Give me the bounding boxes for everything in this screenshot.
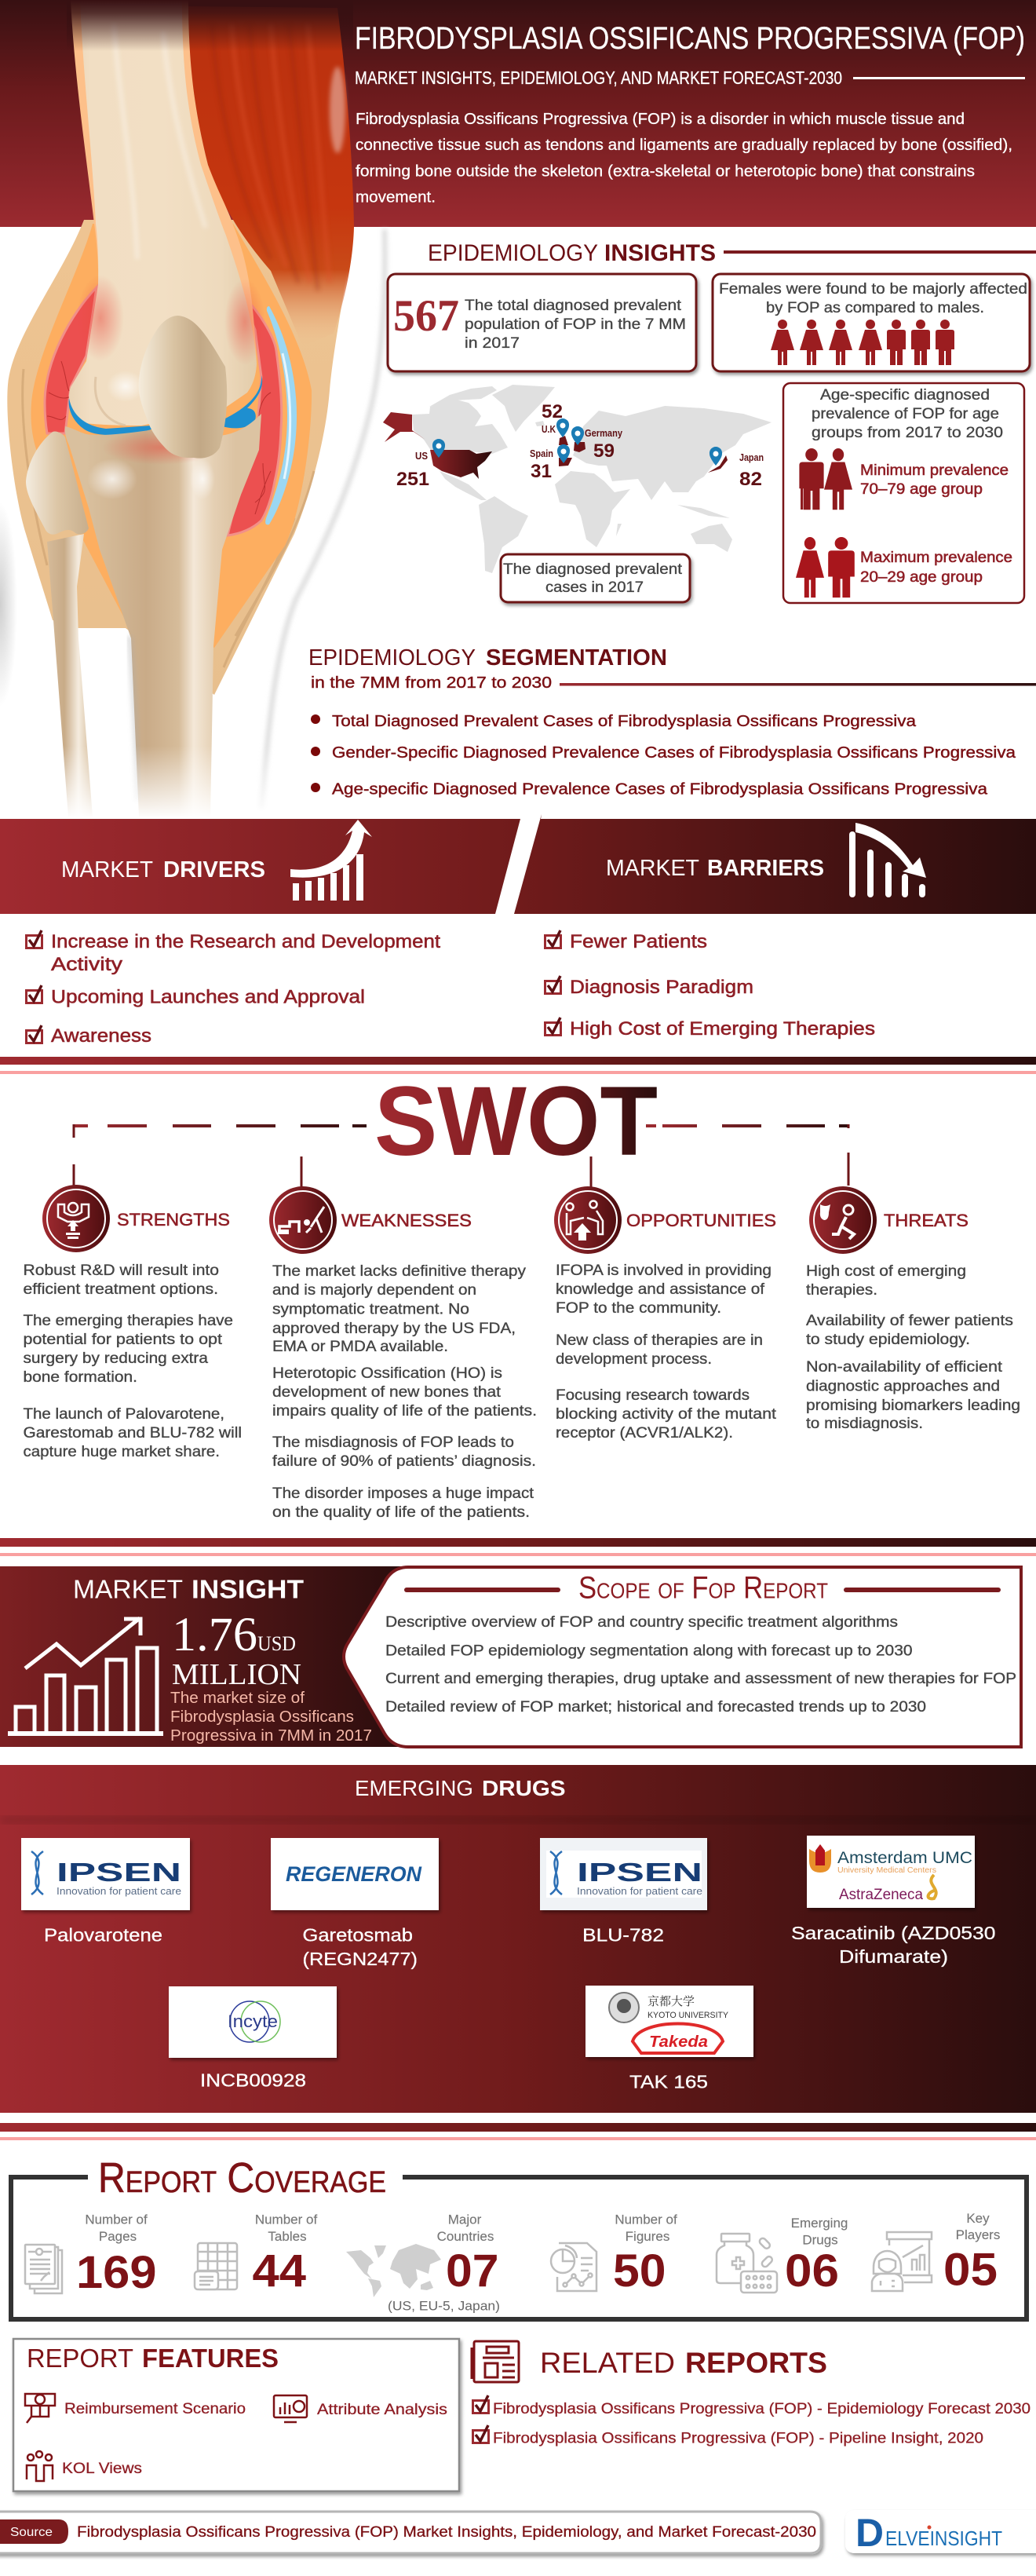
panel: emerging drugs: DRUGS [482,1776,565,1800]
panel: report coverage: Report Coverage [98,2154,386,2201]
stat: major countries [346,2212,500,2313]
icon: people row [771,320,954,365]
icon: strengths [42,1185,110,1252]
text block [806,1263,1020,1432]
list: market barriers: High Cost of Emerging Therapies [570,1018,875,1040]
stat: emerging drugs: Emerging [791,2216,848,2231]
text block: EMA or PMDA available. [272,1339,448,1355]
text block: development process. [556,1351,712,1368]
text block: High cost of emerging [806,1263,966,1280]
callout: diagnosed prevalent cases: The diagnosed prevalent [503,561,683,578]
country values: 251 [396,469,429,490]
panel: strengths: STRENGTHS [117,1210,230,1230]
drug name: Saracatinib (AZD0530 [791,1923,995,1943]
panel: report features [13,2339,459,2491]
logo: Regeneron: REGENERON [286,1862,421,1886]
stat: major countries: (US, EU-5, Japan) [388,2299,500,2313]
icon: opportunities [554,1186,622,1254]
panel: related reports: RELATED [540,2347,675,2379]
text block: Focusing research towards [556,1387,750,1404]
feature: reimbursement scenario: Reimbursement Scenario [64,2400,246,2417]
world map with diagnosed cases [383,385,772,573]
text block: FOP to the community. [556,1300,721,1317]
panel: related reports: Fibrodysplasia Ossificans Progressiva (FOP) - Pipeline Insight, 2020 [493,2431,983,2446]
heading: epidemiology insights [428,240,1036,266]
market size value: USD [257,1632,296,1655]
market size value: 1.76 [172,1609,257,1661]
text block: Robust R&D will result into [24,1262,219,1279]
panel: opportunities [554,1186,777,1441]
logo: Incyte: Incyte [228,2011,278,2031]
stat: emerging drugs [717,2216,848,2296]
feature: attribute analysis: Attribute Analysis [317,2401,447,2418]
country values: Germany [585,427,623,439]
panel: market insight: MARKET [73,1575,183,1603]
segmentation list [311,713,1016,798]
header band [0,0,1036,227]
intro paragraph: forming bone outside the skeleton (extra-skeletal or heterotopic bone) that constrains [356,163,975,181]
scope list: Detailed review of FOP market; historical and forecasted trends up to 2030 [385,1699,926,1716]
panel: age-specific prevalence: 70–79 age group [860,481,983,498]
swot connector lines [73,1124,849,1127]
text block: IFOPA is involved in providing [556,1262,772,1279]
text block: efficient treatment options. [24,1281,218,1298]
stat: figures: 50 [613,2245,666,2296]
feature: KOL views [27,2451,142,2481]
country values: Spain [530,448,553,459]
scope list [385,1614,1016,1716]
text block: New class of therapies are in [556,1332,763,1349]
heading: epidemiology segmentation: EPIDEMIOLOGY [308,645,476,670]
stat: figures: Number of [615,2212,677,2227]
logo: Kyoto University and Takeda [585,1986,753,2057]
callout: females majorly affected: Females were found to be majorly affected [719,281,1027,298]
banner: market drivers: DRIVERS [163,857,265,882]
market size caption: Fibrodysplasia Ossificans [170,1708,354,1726]
heading: epidemiology insights: EPIDEMIOLOGY [428,240,598,266]
text block: The disorder imposes a huge impact [272,1485,534,1502]
list: market barriers: Diagnosis Paradigm [570,977,753,998]
panel: scope of report: Scope of Fop Report [578,1570,828,1605]
logo: DelveInsight: D [855,2511,884,2555]
market size caption [170,1690,372,1745]
drug name [791,1923,995,1967]
country values: 31 [531,461,552,482]
drug name: Difumarate) [839,1946,948,1967]
text block: promising biomarkers leading [806,1398,1020,1414]
country values: Japan [739,451,764,463]
panel: age-specific prevalence: Minimum prevalence [860,462,1009,479]
scope list: Detailed FOP epidemiology segmentation along with forecast up to 2030 [385,1642,912,1660]
banner: market barriers [514,814,1036,914]
callout: 567 total population: population of FOP in the 7 MM [465,316,686,333]
logo: Amsterdam UMC and AstraZeneca: Amsterdam UMC [837,1849,972,1867]
segmentation list: Gender-Specific Diagnosed Prevalence Cases of Fibrodysplasia Ossificans Progressiva [332,744,1016,762]
market size value: MILLION [172,1658,301,1691]
panel: opportunities: OPPORTUNITIES [626,1211,776,1230]
panel: age-specific prevalence [783,383,1024,603]
icon: pill bottle [717,2234,777,2293]
feature: reimbursement scenario [25,2394,246,2423]
text block: The market lacks definitive therapy [272,1263,527,1280]
callout: females majorly affected: by FOP as compared to males. [766,300,984,316]
panel: related reports [472,2341,1031,2446]
callout: females majorly affected [713,274,1030,371]
stat: pages: Number of [85,2212,148,2227]
icon: weaknesses [269,1186,337,1254]
stat: figures [551,2212,677,2296]
stat: key players: Players [956,2227,1000,2242]
logo: Ipsen: IPSEN [57,1858,181,1887]
logo: Ipsen second [540,1838,707,1910]
logo: Ipsen second: IPSEN [577,1858,702,1887]
panel: report features: FEATURES [142,2344,279,2373]
text block: Non-availability of efficient [806,1359,1003,1376]
logo: Kyoto University and Takeda: KYOTO UNIVERSITY [648,2011,729,2020]
icon: world map [346,2244,441,2297]
text block: bone formation. [24,1369,137,1386]
swot heading: SWOT [374,1067,658,1176]
text block [272,1263,537,1521]
text block: surgery by reducing extra [24,1350,208,1367]
stat: pages [25,2212,157,2298]
icon: elderly couple [799,448,852,510]
list: market drivers: Awareness [51,1025,151,1047]
icon: presenter [872,2232,932,2291]
text block: on the quality of life of the patients. [272,1504,530,1521]
panel: related reports: REPORTS [685,2347,827,2379]
icon: rising bars and arrow [290,820,372,901]
icon: document [25,2245,62,2293]
text block: diagnostic approaches and [806,1379,1000,1394]
callout: 567 total population [388,274,696,371]
source bar [0,2512,821,2553]
list: market drivers: Increase in the Research and Development [51,931,440,952]
stat: key players [872,2211,1000,2296]
stat: tables: 44 [253,2245,306,2296]
text block: capture huge market share. [24,1444,220,1460]
intro paragraph [356,111,1012,206]
icon: falling bars and arrow [849,823,926,897]
text block: Availability of fewer patients [806,1313,1013,1329]
stat: figures: Figures [626,2229,669,2244]
source bar: Fibrodysplasia Ossificans Progressiva (FOP) Market Insights, Epidemiology, and Market Forecast-2030 [77,2524,816,2541]
market size caption: The market size of [170,1690,305,1707]
segmentation list: Age-specific Diagnosed Prevalence Cases of Fibrodysplasia Ossificans Progressiva [332,780,988,798]
highlighted countries [430,450,492,479]
text block: The launch of Palovarotene, [24,1406,224,1423]
drug name: BLU-782 [582,1925,664,1946]
drug name: Palovarotene [44,1925,162,1946]
panel: weaknesses [269,1186,537,1521]
icon: report document [472,2341,519,2382]
text block [556,1262,777,1441]
panel: market insight [0,1566,408,1747]
panel: weaknesses: WEAKNESSES [341,1211,472,1230]
drug name: INCB00928 [200,2070,306,2090]
text block: The misdiagnosis of FOP leads to [272,1434,514,1451]
country values: 52 [542,401,563,422]
text block: The emerging therapies have [24,1313,233,1329]
title [355,21,1025,88]
panel: threats [806,1186,1020,1432]
stat: tables: Tables [268,2229,307,2244]
banner: market drivers [0,819,520,914]
list: market drivers: Upcoming Launches and Approval [51,986,365,1008]
panel: related reports: Fibrodysplasia Ossificans Progressiva (FOP) - Epidemiology Forecast 2030 [493,2401,1031,2417]
market size value [172,1609,301,1691]
text block: receptor (ACVR1/ALK2). [556,1425,733,1441]
callout: diagnosed prevalent cases: cases in 2017 [545,579,644,596]
subtitle: MARKET INSIGHTS, EPIDEMIOLOGY, AND MARKET FORECAST-2030 [355,68,842,88]
stat: pages: 169 [76,2247,157,2298]
stat: key players: Key [966,2211,990,2226]
panel: report coverage [11,2154,1027,2319]
callout: diagnosed prevalent cases [501,554,690,602]
stat: key players: 05 [943,2244,998,2296]
text block: and is majorly dependent on [272,1282,476,1299]
panel: age-specific prevalence: Age-specific diagnosed [820,387,990,404]
text block: development of new bones that [272,1384,502,1401]
logo: Amsterdam UMC and AstraZeneca [807,1836,975,1908]
logo: Ipsen [21,1838,190,1910]
logo: Regeneron [271,1838,439,1910]
text block: Garestomab and BLU-782 will [24,1425,242,1441]
icon: growth chart [8,1618,163,1734]
icon: table [195,2243,237,2289]
logo: Ipsen: Innovation for patient care [57,1886,181,1897]
country values: 82 [739,469,762,490]
list: market drivers [27,930,440,1047]
heading: epidemiology segmentation [308,645,1036,692]
callout: 567 total population: 567 [393,291,459,341]
callout: 567 total population: The total diagnosed prevalent [465,298,682,314]
heading: epidemiology segmentation: SEGMENTATION [486,645,667,670]
stat: major countries: Major [448,2212,482,2227]
drug name [303,1925,418,1969]
country values: 59 [593,440,615,462]
stat: emerging drugs: Drugs [802,2233,838,2247]
logo: DelveInsight [845,2510,1036,2555]
panel: age-specific prevalence: 20–29 age group [860,569,983,586]
intro paragraph: connective tissue such as tendons and ligaments are gradually replaced by bone (ossified), [356,137,1012,154]
country values: U.K [542,423,556,435]
panel: age-specific prevalence: groups from 2017 to 2030 [812,425,1003,441]
stat: pages: Pages [99,2229,137,2244]
intro paragraph: Fibrodysplasia Ossificans Progressiva (FOP) is a disorder in which muscle tissue and [356,111,965,128]
text block: to misdiagnosis. [806,1416,923,1432]
text block [24,1262,242,1460]
drug name: (REGN2477) [303,1949,418,1969]
logo: Ipsen second: Innovation for patient care [577,1886,702,1897]
text block: blocking activity of the mutant [556,1406,777,1423]
logo: DelveInsight: ELVEINSIGHT [885,2527,1002,2550]
feature: attribute analysis [274,2395,447,2422]
text block: impairs quality of life of the patients. [272,1403,537,1420]
text block: symptomatic treatment. No [272,1302,469,1317]
stat: major countries: 07 [446,2245,499,2296]
stat: emerging drugs: 06 [785,2245,839,2296]
country values: US [415,450,428,462]
panel: scope of report [344,1567,1021,1747]
panel: age-specific prevalence: prevalence of FOP for age [812,406,999,422]
icon: young couple [796,537,855,597]
list: market drivers: Activity [51,954,122,975]
logo: Amsterdam UMC and AstraZeneca: University Medical Centers [837,1866,936,1875]
panel: threats: THREATS [884,1211,969,1230]
drug name: Garetosmab [303,1925,413,1946]
panel: strengths [24,1185,242,1460]
list: market barriers [545,930,875,1040]
heading: epidemiology segmentation: in the 7MM from 2017 to 2030 [311,674,552,692]
market size caption: Progressiva in 7MM in 2017 [170,1727,372,1745]
drug name: TAK 165 [629,2071,708,2092]
text block: knowledge and assistance of [556,1281,765,1298]
country values [396,401,764,490]
source bar: Source [10,2526,53,2539]
icon: threats [809,1186,877,1254]
logo: Incyte [169,1986,337,2058]
icon: report figures [551,2243,596,2291]
panel: emerging drugs: EMERGING [355,1776,473,1800]
logo: Kyoto University and Takeda: Takeda [649,2033,708,2051]
panel: age-specific prevalence: Maximum prevalence [860,550,1012,566]
text block: to study epidemiology. [806,1332,970,1348]
intro paragraph: movement. [356,188,436,206]
banner: market barriers: BARRIERS [707,856,824,881]
text block: Heterotopic Ossification (HO) is [272,1365,502,1382]
list: market barriers: Fewer Patients [570,931,707,952]
scope list: Current and emerging therapies, drug uptake and assessment of new therapies for FOP [385,1671,1016,1687]
logo: Amsterdam UMC and AstraZeneca: AstraZeneca [839,1887,923,1903]
scope list: Descriptive overview of FOP and country specific treatment algorithms [385,1614,898,1631]
knee anatomy illustration [0,0,392,819]
feature: KOL views: KOL Views [62,2460,142,2477]
text block: approved therapy by the US FDA, [272,1321,516,1337]
text block: potential for patients to opt [24,1332,223,1348]
text block: failure of 90% of patients’ diagnosis. [272,1453,536,1470]
stat: tables [195,2212,317,2296]
banner: market barriers: MARKET [606,856,699,881]
heading: epidemiology insights: INSIGHTS [604,240,716,266]
panel: market insight: INSIGHT [192,1575,304,1603]
panel: emerging drugs [0,1765,1036,2113]
map pins [432,418,722,466]
logo: Kyoto University and Takeda: 京都大学 [648,1993,695,2009]
segmentation list: Total Diagnosed Prevalent Cases of Fibrodysplasia Ossificans Progressiva [332,713,917,730]
stat: major countries: Countries [437,2229,494,2244]
panel: report features: REPORT [27,2344,133,2373]
text block: therapies. [806,1282,877,1299]
banner: market drivers: MARKET [61,857,153,882]
stat: tables: Number of [255,2212,317,2227]
callout: 567 total population: in 2017 [465,335,520,352]
